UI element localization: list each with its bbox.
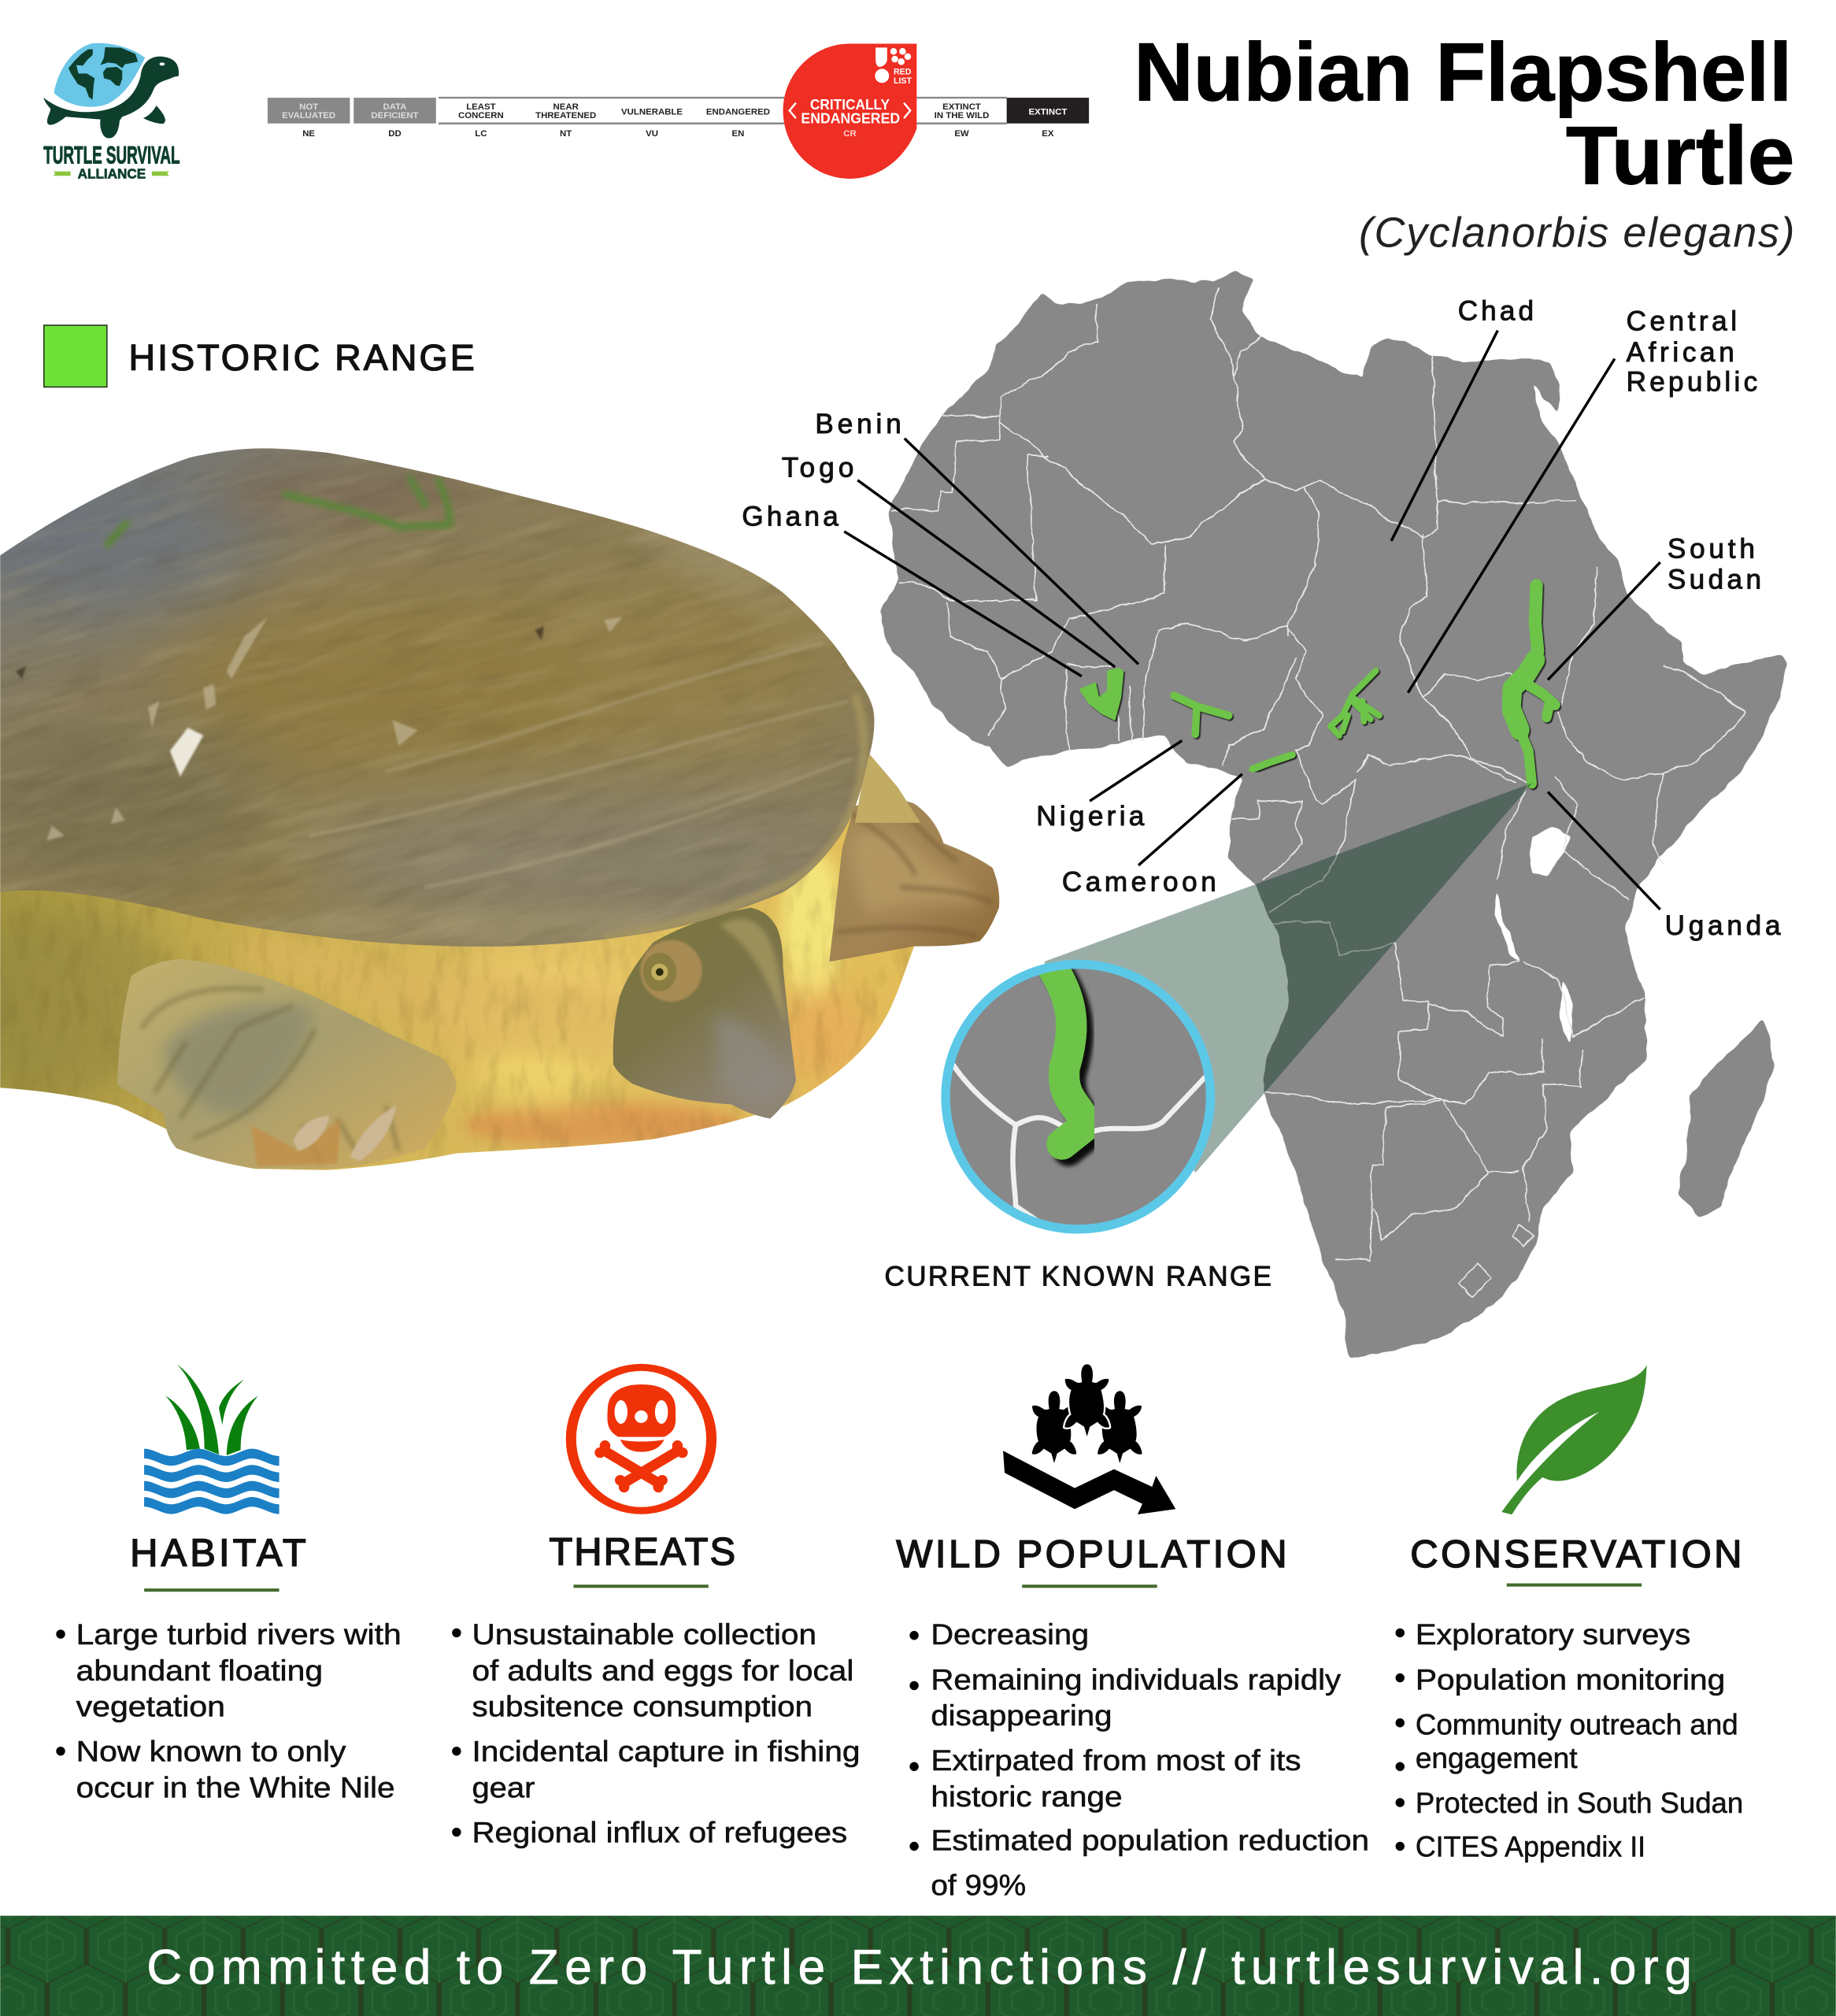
country labels: Sudan <box>1668 565 1761 595</box>
flipper claws <box>294 1106 396 1161</box>
country labels: Central <box>1627 306 1737 337</box>
heading: wild population: WILD POPULATION <box>896 1533 1287 1576</box>
conservation list: Population monitoring <box>1416 1663 1725 1695</box>
wild population list: Extirpated from most of its <box>931 1744 1301 1777</box>
threats list: subsitence consumption <box>472 1691 813 1723</box>
logo green bars <box>54 172 169 176</box>
conservation list: Community outreach and <box>1416 1708 1738 1740</box>
heading: threats: THREATS <box>549 1531 735 1573</box>
turtle photo <box>0 448 1000 1170</box>
logo: Turtle Survival Alliance <box>43 43 180 181</box>
legend: historic range: HISTORIC RANGE <box>129 337 475 378</box>
inset river <box>1046 958 1086 1144</box>
head highlight <box>720 919 787 1028</box>
status labels: THREATENED <box>535 111 596 120</box>
conservation list: CITES Appendix II <box>1416 1831 1645 1863</box>
conservation list <box>1396 1618 1743 1863</box>
country labels: African <box>1627 337 1734 368</box>
historic range: Cameroon <box>1253 754 1292 769</box>
conservation list: Exploratory surveys <box>1416 1618 1690 1651</box>
title: Nubian Flapshell <box>1134 26 1792 118</box>
wild population list <box>909 1618 1369 1902</box>
turtle eye <box>640 939 702 1002</box>
wild population list: disappearing <box>931 1699 1112 1732</box>
wild population list: Estimated population reduction <box>931 1824 1369 1856</box>
panel: habitat <box>56 1364 402 1803</box>
icon: skull and crossbones <box>571 1367 712 1510</box>
status labels <box>282 96 1067 139</box>
map of Africa <box>742 272 1787 1359</box>
lakes <box>1495 828 1574 1045</box>
threats list: gear <box>472 1771 535 1803</box>
historic range: White Nile <box>1511 586 1555 784</box>
zoom wedge <box>1044 783 1532 1173</box>
country labels: Chad <box>1458 296 1534 327</box>
icon: grass and water <box>144 1364 279 1514</box>
logo turtle shell with globe <box>54 43 145 107</box>
status labels: NEAR <box>553 102 579 112</box>
status labels: CR <box>843 129 857 139</box>
icon: leaf <box>1501 1366 1647 1514</box>
logo turtle body <box>43 57 179 139</box>
threats list: Unsustainable collection <box>472 1618 816 1651</box>
country labels: Togo <box>782 453 853 484</box>
icon: declining turtles <box>1003 1364 1175 1514</box>
label: current known range: CURRENT KNOWN RANGE <box>885 1262 1272 1292</box>
status labels: EX <box>1042 129 1054 139</box>
status labels: CRITICALLY <box>810 96 890 113</box>
logo eye <box>160 62 165 65</box>
status labels: DATA <box>383 102 407 112</box>
status labels: EVALUATED <box>282 111 335 120</box>
current range inset circle <box>945 958 1210 1229</box>
country labels: South <box>1668 534 1755 565</box>
title: Turtle <box>1566 109 1794 202</box>
country labels: Benin <box>815 409 901 439</box>
country labels: Republic <box>1627 366 1757 397</box>
inset borders <box>953 1063 1205 1219</box>
habitat list: occur in the White Nile <box>76 1771 395 1803</box>
status labels: ENDANGERED <box>801 110 900 127</box>
habitat list: Now known to only <box>76 1736 346 1768</box>
wild population list: of 99% <box>931 1870 1026 1902</box>
red list mark <box>875 47 912 86</box>
Madagascar <box>1677 1019 1775 1218</box>
threats list: of adults and eggs for local <box>472 1655 853 1687</box>
footer tagline: Committed to Zero Turtle Extinctions // turtlesurvival.org <box>146 1940 1692 1995</box>
right front flipper <box>821 799 999 962</box>
status labels: NE <box>302 129 315 139</box>
habitat list: abundant floating <box>76 1655 323 1687</box>
logo continents <box>68 47 138 100</box>
title <box>1134 26 1794 202</box>
status labels: LEAST <box>466 102 496 112</box>
IUCN red list status bar <box>268 44 1089 179</box>
scientific name: (Cyclanorbis elegans) <box>1359 209 1794 256</box>
conservation list: Protected in South Sudan <box>1416 1787 1743 1819</box>
Africa landmass <box>880 272 1787 1359</box>
country labels: Cameroon <box>1062 866 1216 897</box>
extinct box <box>1007 98 1089 124</box>
legend: historic range <box>44 325 475 387</box>
heading: habitat: HABITAT <box>130 1532 306 1575</box>
country labels: Uganda <box>1665 910 1781 941</box>
flipper fold <box>836 807 993 936</box>
country labels: Ghana <box>742 502 838 532</box>
snout shading <box>713 1016 790 1102</box>
flipper orange webbing <box>251 1118 341 1166</box>
habitat list: Large turbid rivers with <box>76 1618 402 1651</box>
logo sub wordmark: ALLIANCE <box>78 165 146 181</box>
status labels: VULNERABLE <box>621 107 683 117</box>
habitat list <box>56 1618 402 1803</box>
status labels: NOT <box>299 102 318 112</box>
wild population list: Decreasing <box>931 1618 1089 1651</box>
threats list: Incidental capture in fishing <box>472 1736 861 1768</box>
turtle body <box>0 760 914 1170</box>
threats list: Regional influx of refugees <box>472 1817 847 1849</box>
flipper wrinkles <box>142 988 398 1164</box>
shell skirt near flipper <box>855 752 920 823</box>
status labels: ENDANGERED <box>706 107 770 117</box>
red list mark: RED <box>894 68 912 77</box>
historic range: Nigeria <box>1174 695 1229 734</box>
historic range: Ghana Togo <box>1079 668 1123 721</box>
turtle shell <box>0 448 874 947</box>
status labels: IN THE WILD <box>935 111 989 120</box>
bar boxes <box>268 98 436 124</box>
status labels: DEFICIENT <box>371 111 419 120</box>
status labels: VU <box>646 129 658 139</box>
leader lines <box>844 331 1660 910</box>
country borders <box>891 287 1747 1297</box>
red list mark: LIST <box>894 76 912 86</box>
heading: conservation: CONSERVATION <box>1410 1533 1742 1576</box>
status labels: EXTINCT <box>1028 107 1067 117</box>
status labels: CONCERN <box>458 111 504 120</box>
flipper shading <box>851 831 983 915</box>
flipper grey folds <box>164 1005 314 1114</box>
status labels: DD <box>388 129 402 139</box>
logo wordmark: TURTLE SURVIVAL <box>43 141 180 169</box>
status labels: NT <box>560 129 572 139</box>
status labels: LC <box>475 129 487 139</box>
panel: conservation <box>1396 1366 1743 1863</box>
left flipper <box>117 959 457 1169</box>
panel: wild population <box>896 1364 1369 1902</box>
habitat list: vegetation <box>76 1691 225 1723</box>
country labels: Nigeria <box>1036 801 1145 832</box>
critically endangered highlight <box>783 44 916 179</box>
turtle head <box>613 908 796 1118</box>
country labels <box>742 296 1781 941</box>
status labels: EN <box>731 129 744 139</box>
threats list <box>452 1618 861 1849</box>
status labels: EW <box>954 129 969 139</box>
conservation list: engagement <box>1416 1742 1578 1774</box>
historic range: Central African Republic <box>1331 671 1379 736</box>
wild population list: historic range <box>931 1781 1123 1813</box>
wild population list: Remaining individuals rapidly <box>931 1663 1342 1695</box>
status labels: EXTINCT <box>942 102 981 112</box>
footer banner <box>0 1916 1836 2016</box>
panel: threats <box>452 1367 861 1849</box>
